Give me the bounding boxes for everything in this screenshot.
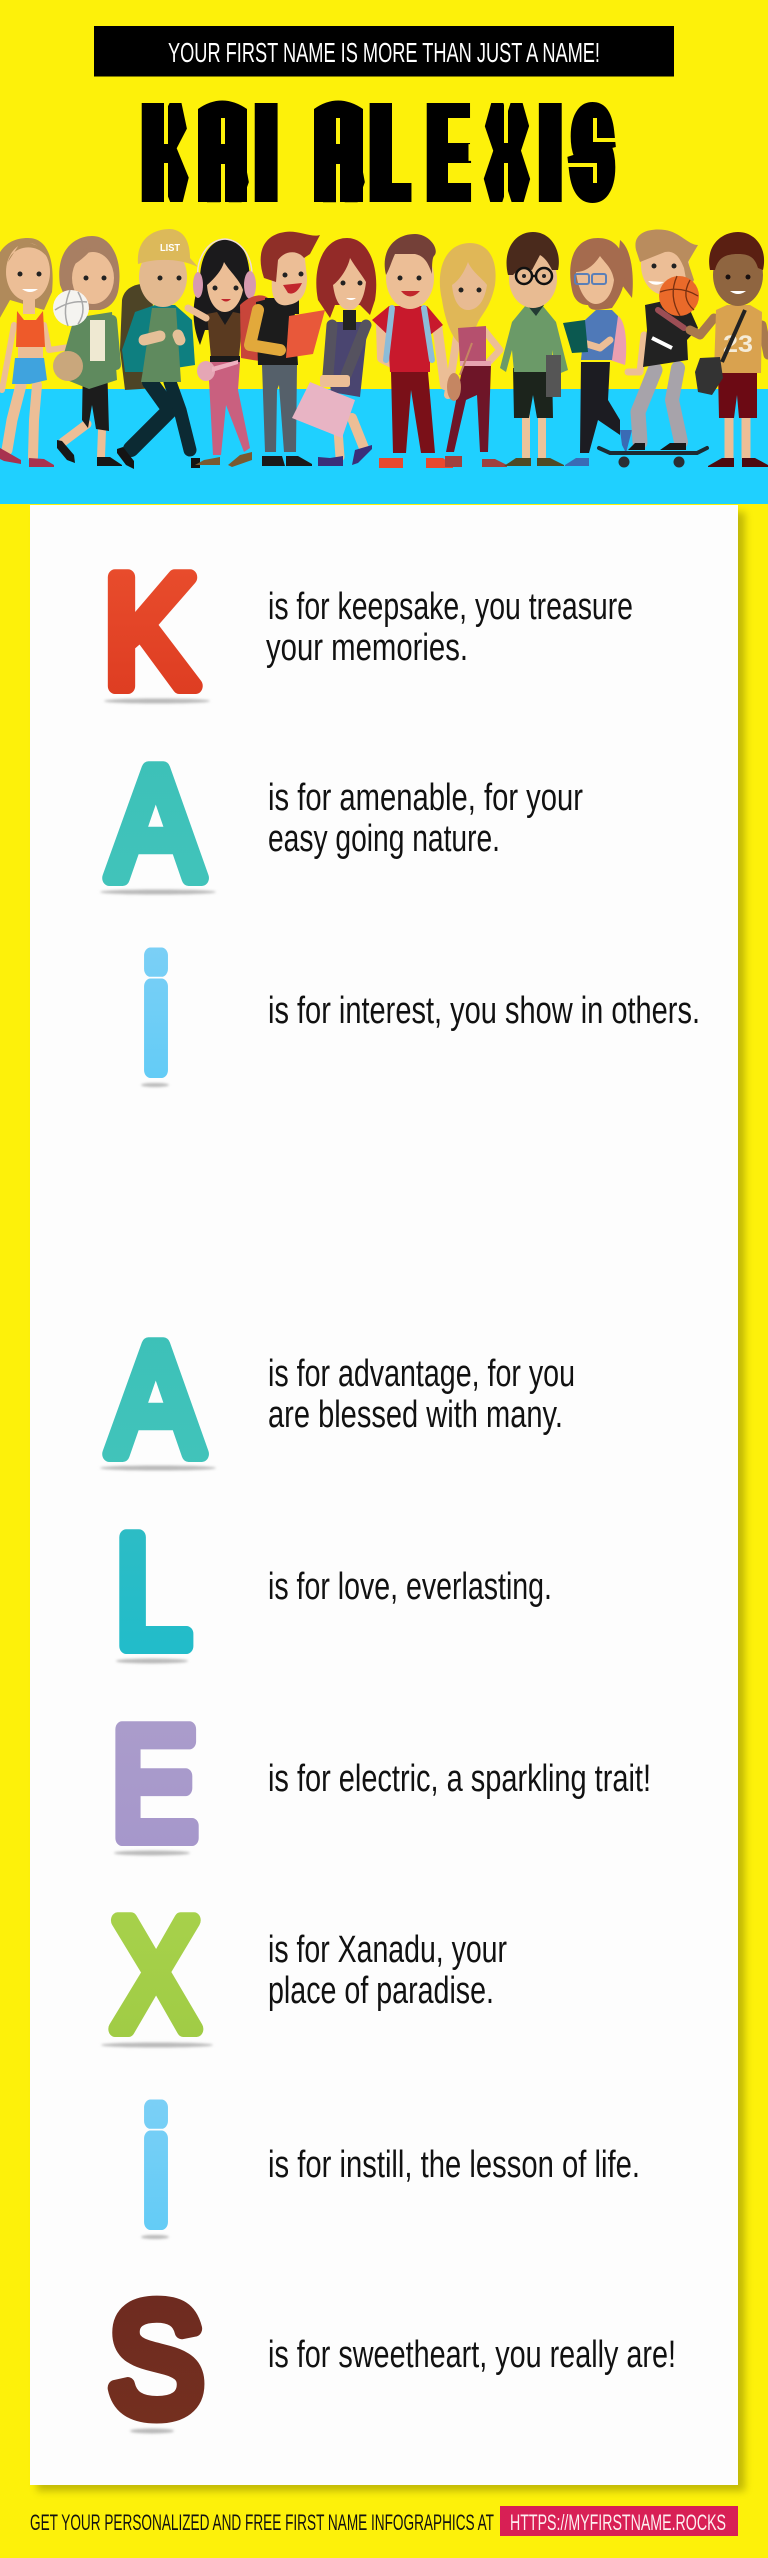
row: A: is for amenable, for your xyxy=(268,777,583,819)
row: E: is for electric, a sparkling trait! xyxy=(268,1758,651,1800)
person: boy in tan tank top xyxy=(690,232,768,467)
person: boy in red shirt xyxy=(372,234,453,468)
blue floor band xyxy=(0,389,768,504)
person: girl with headphones xyxy=(188,239,256,467)
row: A: A xyxy=(109,735,203,912)
person: boy in tan tank top: 23 xyxy=(723,331,753,358)
row: K: K xyxy=(103,543,197,720)
row: E: E xyxy=(111,1695,198,1872)
title: KAI ALEXIS xyxy=(146,96,610,208)
row: A xyxy=(100,735,583,912)
person: girl with ponytail and tablet xyxy=(563,238,633,466)
row: I: is for instill, the lesson of life. xyxy=(268,2144,640,2186)
row: A: easy going nature. xyxy=(268,818,500,860)
row: K: your memories. xyxy=(266,627,468,669)
row: L: is for love, everlasting. xyxy=(268,1566,552,1608)
row: X xyxy=(101,1886,507,2063)
row: X: X xyxy=(112,1886,199,2063)
header banner xyxy=(94,26,674,77)
row: A: is for advantage, for you xyxy=(268,1353,575,1395)
row: A xyxy=(100,1311,575,1488)
row: X: place of paradise. xyxy=(268,1970,494,2012)
panel shadow xyxy=(37,512,745,2491)
person: man with cap and backpack: LIST xyxy=(160,243,180,254)
row: A: are blessed with many. xyxy=(268,1394,563,1436)
row: E xyxy=(111,1695,651,1872)
row: I xyxy=(141,2080,640,2256)
row: I xyxy=(141,928,700,1104)
person: girl with volleyball xyxy=(53,236,122,466)
row: X: is for Xanadu, your xyxy=(268,1929,507,1971)
row: K xyxy=(103,543,633,720)
row: S: S xyxy=(108,2271,204,2448)
person: blonde girl xyxy=(440,243,507,467)
row: L xyxy=(115,1504,552,1680)
row: K: is for keepsake, you treasure xyxy=(268,586,633,628)
person: boy with book xyxy=(240,232,325,466)
person: girl with pink bag xyxy=(292,238,376,466)
person: boy with glasses xyxy=(500,232,568,466)
person: man with cap and backpack xyxy=(117,229,200,469)
illustration: group of students xyxy=(0,229,768,469)
row: L: L xyxy=(115,1504,191,1680)
footer call to action: GET YOUR PERSONALIZED AND FREE FIRST NAME INFOGRAPHICS AT xyxy=(30,2510,494,2535)
person: girl in orange top xyxy=(0,238,76,467)
panel: letters and meanings xyxy=(30,505,738,2485)
row: S xyxy=(108,2271,676,2448)
row: I: i xyxy=(142,2080,170,2256)
person: boy on skateboard with basketball xyxy=(599,230,707,468)
row: I: i xyxy=(142,928,170,1104)
row: A: A xyxy=(109,1311,203,1488)
